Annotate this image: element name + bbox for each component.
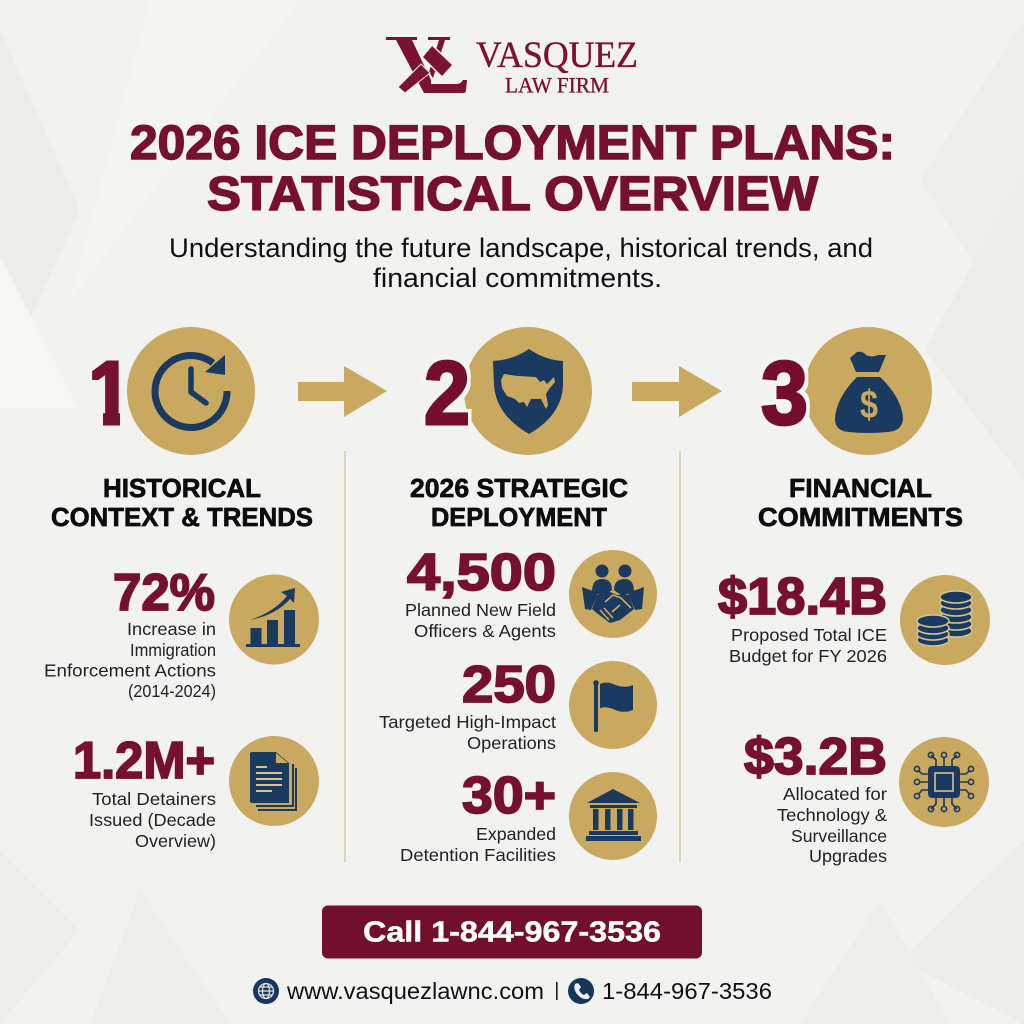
icon: coin stacks xyxy=(900,575,990,665)
stat: 1.2M+ total detainers xyxy=(73,732,216,851)
stat: 1.2M+ total detainers: Total Detainers xyxy=(92,789,216,809)
stat: $18.4B total budget: Budget for FY 2026 xyxy=(729,646,887,666)
step 1 header: number and clock icon: 1 xyxy=(88,344,132,444)
title xyxy=(130,117,895,221)
step 2 header: number and shield icon xyxy=(424,327,592,455)
stat: $3.2B technology and surveillance: Allocated for xyxy=(783,784,887,804)
icon: microchip xyxy=(899,737,989,827)
stat: $3.2B technology and surveillance: Technology & xyxy=(777,805,887,825)
phone number text: 1-844-967-3536 xyxy=(602,978,772,1004)
heading: 2026 strategic deployment: DEPLOYMENT xyxy=(431,502,607,532)
stat: 30+ expanded detention facilities xyxy=(400,767,556,865)
website text: www.vasquezlawnc.com xyxy=(286,978,544,1004)
stat: $18.4B total budget: Proposed Total ICE xyxy=(731,625,887,645)
stat: 30+ expanded detention facilities: Expanded xyxy=(476,824,556,844)
logo tagline: LAW FIRM xyxy=(505,72,609,98)
stat: 72% increase in enforcement actions xyxy=(44,564,216,701)
icon: globe xyxy=(253,978,279,1004)
stat: 1.2M+ total detainers: Issued (Decade xyxy=(89,810,216,830)
step 3 header: number and money bag icon xyxy=(761,327,932,455)
arrow: step 2 to step 3 xyxy=(632,366,722,417)
icon: government building xyxy=(569,772,657,860)
icon: handshake with two people xyxy=(569,550,657,638)
stat: 250 high-impact operations: Targeted High-Impact xyxy=(379,712,556,732)
icon: rising bar chart xyxy=(229,574,319,664)
stat: 250 high-impact operations: 250 xyxy=(462,656,556,714)
title: 2026 ICE DEPLOYMENT PLANS: xyxy=(130,117,895,170)
stat: 30+ expanded detention facilities: Detention Facilities xyxy=(400,845,556,865)
logo: Vasquez Law Firm xyxy=(386,35,638,98)
heading: financial commitments: COMMITMENTS xyxy=(758,502,963,532)
heading: financial commitments: FINANCIAL xyxy=(789,473,932,503)
stat: $18.4B total budget xyxy=(718,568,887,666)
stat: 30+ expanded detention facilities: 30+ xyxy=(462,767,556,825)
heading: financial commitments xyxy=(758,473,963,532)
stat: 1.2M+ total detainers: 1.2M+ xyxy=(73,732,215,790)
stat: 4,500 new field officers: Planned New Field xyxy=(405,600,556,620)
stat: 72% increase in enforcement actions: (2014-2024) xyxy=(128,681,216,701)
stat: 4,500 new field officers: Officers & Agents xyxy=(414,621,556,641)
step 3 header: number and money bag icon: 3 xyxy=(761,344,808,444)
stat: 1.2M+ total detainers: Overview) xyxy=(135,831,216,851)
icon: phone xyxy=(568,978,594,1004)
footer: website and phone contact xyxy=(253,978,772,1004)
stat: 72% increase in enforcement actions: Enforcement Actions xyxy=(44,660,216,680)
stat: $18.4B total budget: $18.4B xyxy=(718,568,887,626)
icon: stacked documents xyxy=(229,736,319,826)
stat: 72% increase in enforcement actions: 72% xyxy=(113,564,215,622)
heading: historical context and trends xyxy=(51,473,313,532)
separator xyxy=(556,982,558,1000)
stat: 72% increase in enforcement actions: Increase in xyxy=(127,619,216,639)
stat: $3.2B technology and surveillance: Surveillance xyxy=(791,826,887,846)
stat: 72% increase in enforcement actions: Immigration xyxy=(130,640,216,660)
step 1 header: number and clock icon xyxy=(88,327,255,455)
icon: flag xyxy=(569,661,657,749)
stat: 250 high-impact operations: Operations xyxy=(467,733,556,753)
logo wordmark: VASQUEZ xyxy=(476,35,638,76)
heading: historical context and trends: CONTEXT & TRENDS xyxy=(51,502,313,532)
subtitle xyxy=(169,233,873,293)
stat: 4,500 new field officers: 4,500 xyxy=(407,544,556,602)
heading: 2026 strategic deployment xyxy=(410,473,628,532)
logo mark: VL monogram with gavel xyxy=(386,37,467,93)
stat: 250 high-impact operations xyxy=(379,656,556,753)
heading: historical context and trends: HISTORICAL xyxy=(103,473,261,503)
stat: $3.2B technology and surveillance xyxy=(744,728,887,866)
step 3 header: number and money bag icon: $ xyxy=(860,383,878,427)
arrow: step 1 to step 2 xyxy=(298,366,387,417)
stat: $3.2B technology and surveillance: Upgrades xyxy=(809,846,887,866)
subtitle: Understanding the future landscape, historical trends, and xyxy=(169,233,873,263)
stat: $3.2B technology and surveillance: $3.2B xyxy=(744,728,887,786)
heading: 2026 strategic deployment: 2026 STRATEGIC xyxy=(410,473,628,503)
step 2 header: number and shield icon: 2 xyxy=(424,344,470,444)
stat: 4,500 new field officers xyxy=(405,544,556,641)
title: STATISTICAL OVERVIEW xyxy=(207,168,819,221)
subtitle: financial commitments. xyxy=(373,263,662,293)
call button xyxy=(322,906,702,958)
call button: Call 1-844-967-3536 xyxy=(363,916,661,948)
